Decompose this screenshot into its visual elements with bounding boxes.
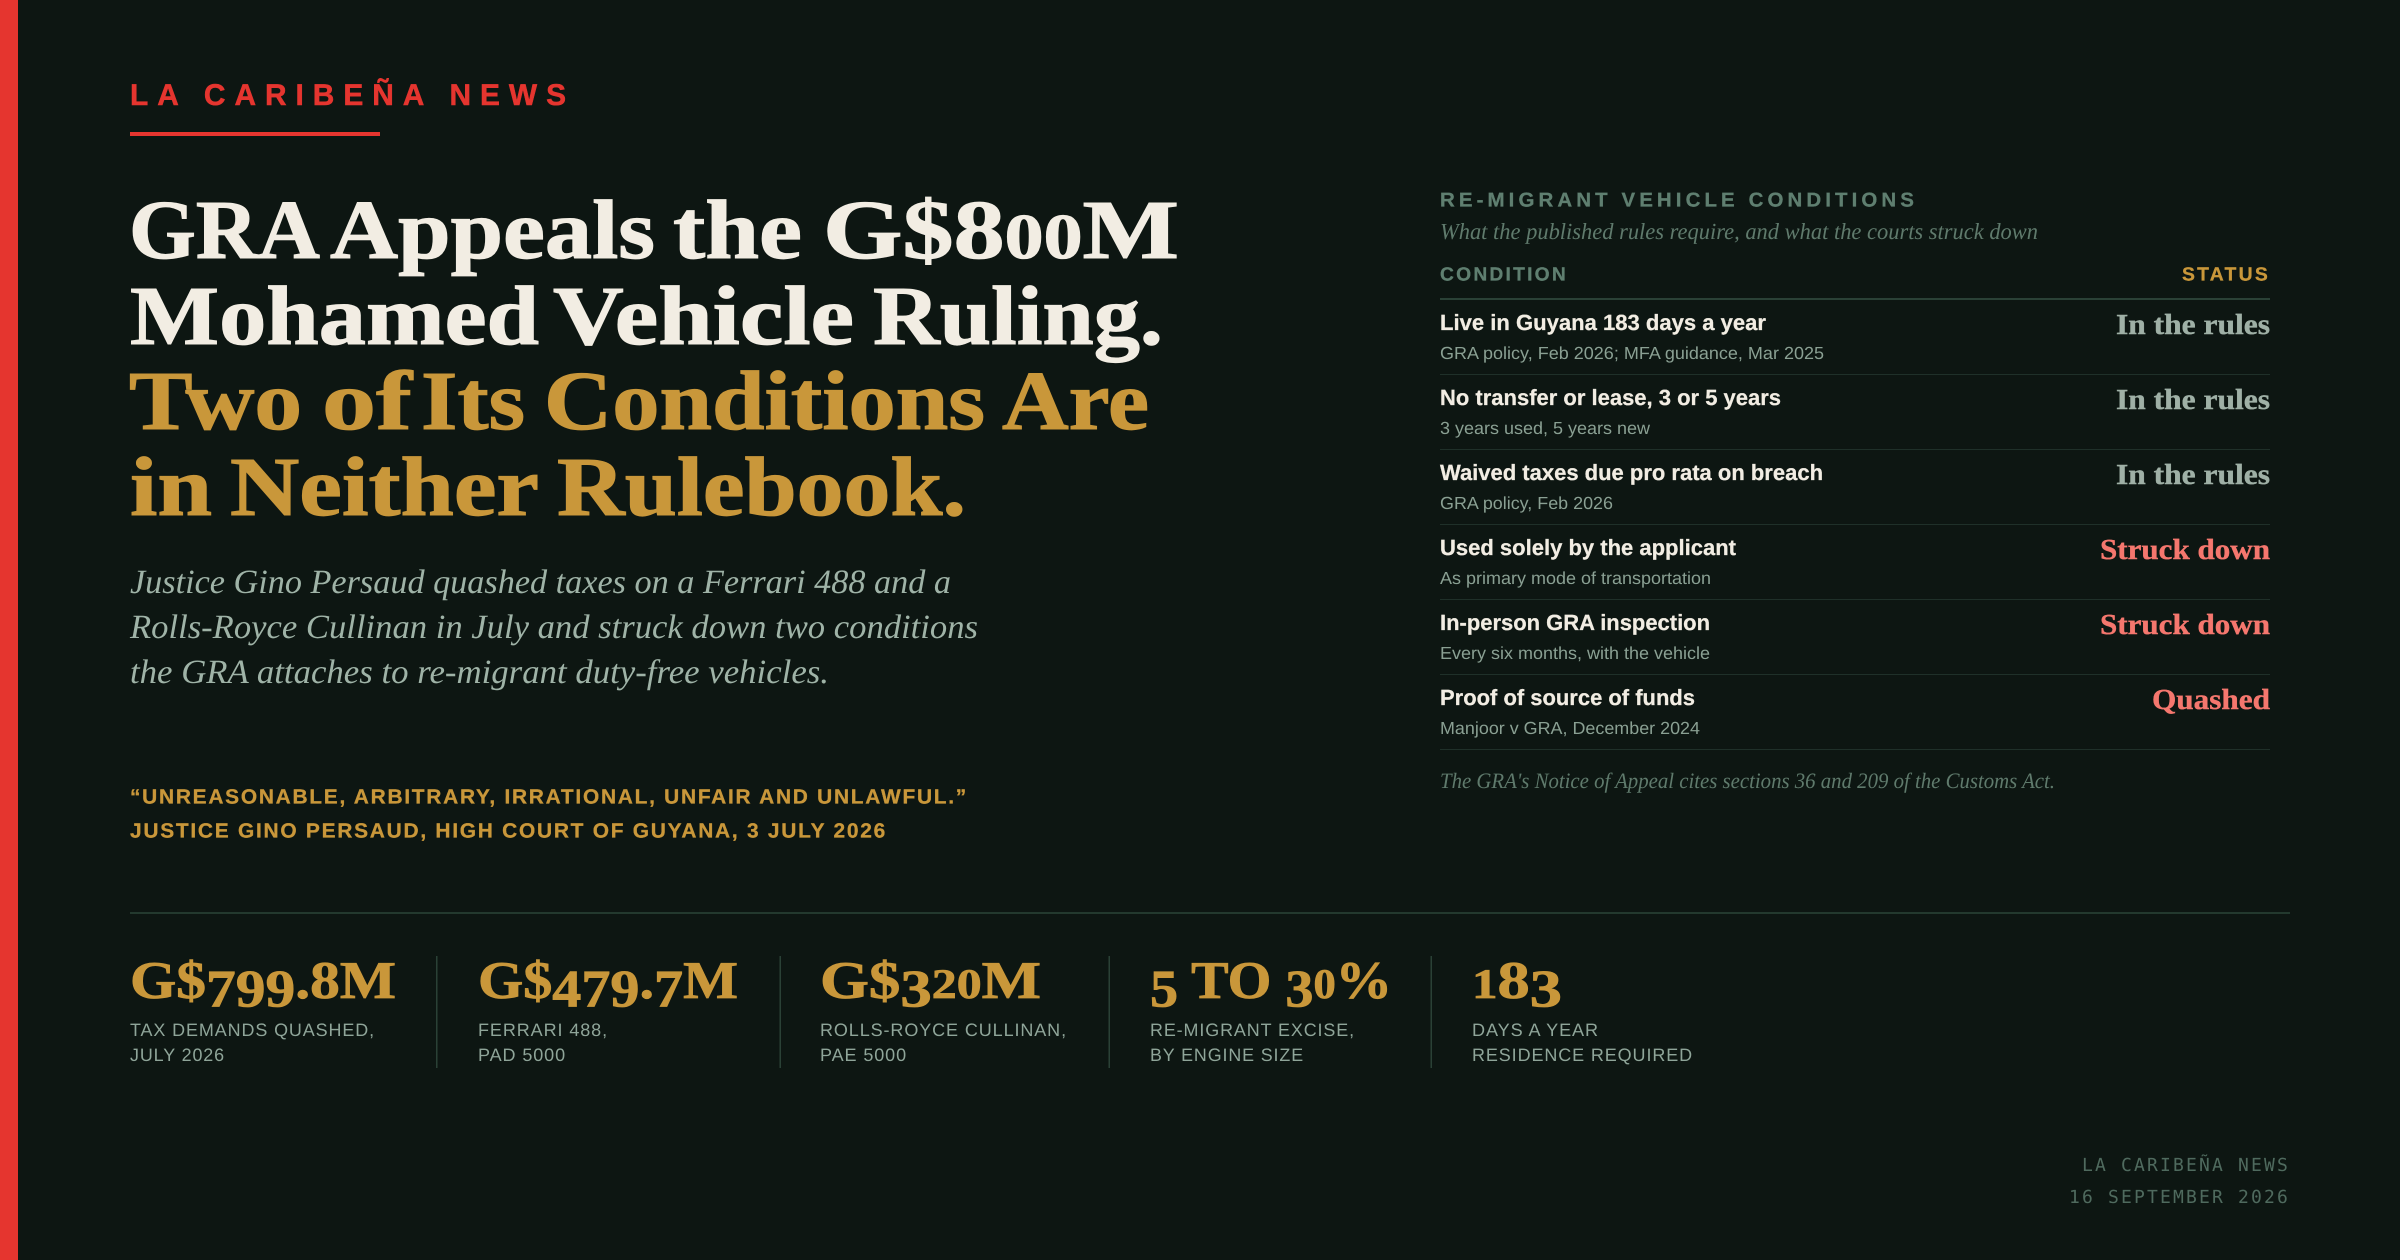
stat: excise: 5 <box>1150 960 1178 1018</box>
stat: Ferrari: . <box>640 952 654 1010</box>
table heading: RE-MIGRANT VEHICLE CONDITIONS <box>1440 190 1918 212</box>
row: live in Guyana: Live in Guyana 183 days a year <box>1440 310 1766 335</box>
row: live in Guyana: GRA policy, Feb 2026; MFA guidance, Mar 2025 <box>1440 343 1824 363</box>
stat: Ferrari: PAD 5000 <box>478 1045 566 1065</box>
stat: residence days: RESIDENCE REQUIRED <box>1472 1045 1693 1065</box>
row: waived taxes: GRA policy, Feb 2026 <box>1440 493 1613 513</box>
row: in-person inspection: In-person GRA inspection <box>1440 610 1710 635</box>
masthead <box>130 78 575 136</box>
row: in-person inspection <box>1440 609 2270 663</box>
row: waived taxes: In the rules <box>2116 459 2270 491</box>
stat: excise: 0 <box>1314 962 1336 1008</box>
stat: residence days: 3 <box>1530 960 1562 1018</box>
stat: Ferrari: G$ <box>478 952 546 1010</box>
stat: tax demands: G$ <box>130 952 198 1010</box>
row: live in Guyana: In the rules <box>2116 309 2270 341</box>
stat: tax demands <box>130 952 396 1065</box>
stat: excise <box>1150 952 1392 1065</box>
stat: Ferrari: 7 <box>654 960 683 1018</box>
headline: of <box>322 355 413 448</box>
stat: Ferrari: 479 <box>552 960 640 1018</box>
stat: Rolls-Royce: ROLLS-ROYCE CULLINAN, <box>820 1020 1067 1040</box>
row: no transfer: No transfer or lease, 3 or 5 years <box>1440 385 1781 410</box>
column header: status: STATUS <box>2182 264 2270 286</box>
row: used solely <box>1440 534 2270 588</box>
panel: conditions table <box>1440 190 2270 793</box>
stat: tax demands: .8M <box>295 952 396 1010</box>
row: proof of funds: Quashed <box>2152 684 2270 716</box>
headline: in <box>130 441 212 534</box>
row: no transfer: 3 years used, 5 years new <box>1440 418 1650 438</box>
row: used solely: Used solely by the applicant <box>1440 535 1737 560</box>
footer credit: LA CARIBEÑA NEWS <box>2082 1154 2290 1176</box>
row: used solely: As primary mode of transportation <box>1440 568 1711 588</box>
stat: tax demands: TAX DEMANDS QUASHED, <box>130 1020 375 1040</box>
stat: excise: % <box>1336 952 1389 1010</box>
row: in-person inspection: Struck down <box>2100 609 2270 641</box>
row: proof of funds: Proof of source of funds <box>1440 685 1695 710</box>
footer credit <box>2069 1154 2290 1208</box>
red edge bar <box>0 0 18 1260</box>
deck text: Justice Gino Persaud quashed taxes on a Ferrari 488 and a <box>130 564 951 601</box>
stat: Rolls-Royce: G$ <box>820 952 888 1010</box>
headline: Appeals <box>330 184 655 277</box>
stat: Rolls-Royce: 20 <box>932 962 982 1008</box>
column header: condition: CONDITION <box>1440 264 1568 286</box>
deck text: Rolls-Royce Cullinan in July and struck down two conditions <box>129 609 978 646</box>
headline <box>129 184 1179 534</box>
deck text: the GRA attaches to re-migrant duty-free vehicles. <box>130 654 829 691</box>
stat: residence days: DAYS A YEAR <box>1472 1020 1599 1040</box>
pull quote: JUSTICE GINO PERSAUD, HIGH COURT OF GUYANA, 3 JULY 2026 <box>130 820 887 842</box>
stat: excise: RE-MIGRANT EXCISE, <box>1150 1020 1355 1040</box>
stat: Ferrari: FERRARI 488, <box>478 1020 608 1040</box>
masthead: LA CARIBEÑA NEWS <box>130 78 575 112</box>
table subheading: What the published rules require, and what the courts struck down <box>1440 219 2038 244</box>
row: no transfer: In the rules <box>2116 384 2270 416</box>
pull quote: “UNREASONABLE, ARBITRARY, IRRATIONAL, UNFAIR AND UNLAWFUL.” <box>130 786 968 808</box>
pull quote <box>130 786 968 842</box>
row: used solely: Struck down <box>2100 534 2270 566</box>
stat: Rolls-Royce: 3 <box>900 960 932 1018</box>
row: waived taxes: Waived taxes due pro rata on breach <box>1440 460 1823 485</box>
stat: excise: TO <box>1178 952 1285 1010</box>
row: proof of funds <box>1440 684 2270 738</box>
headline: Ruling. <box>873 270 1163 363</box>
stat: Rolls-Royce: PAE 5000 <box>820 1045 907 1065</box>
row: waived taxes <box>1440 459 2270 513</box>
headline: Are <box>1002 355 1149 448</box>
headline: Two <box>129 355 302 448</box>
headline: Mohamed <box>130 270 539 363</box>
stat: excise: 3 <box>1285 960 1314 1018</box>
headline: G$8 00M <box>823 184 1179 277</box>
stat: tax demands: 799 <box>206 960 295 1018</box>
headline: Rulebook. <box>557 441 966 534</box>
stat: Rolls-Royce: M <box>982 952 1032 1010</box>
headline: Vehicle <box>553 270 854 363</box>
stat: residence days: 18 <box>1472 952 1524 1010</box>
headline: Neither <box>230 441 539 534</box>
stat: Rolls-Royce <box>820 952 1067 1065</box>
stat: excise: BY ENGINE SIZE <box>1150 1045 1304 1065</box>
stat: Ferrari <box>478 952 738 1065</box>
row: no transfer <box>1440 384 2270 438</box>
footer credit: 16 SEPTEMBER 2026 <box>2069 1187 2290 1208</box>
headline: Its <box>421 355 525 448</box>
stat: residence days <box>1472 952 1693 1065</box>
headline: Conditions <box>544 355 985 448</box>
row: proof of funds: Manjoor v GRA, December 2024 <box>1440 718 1700 738</box>
row: live in Guyana <box>1440 309 2270 363</box>
deck text <box>129 564 978 691</box>
headline: GRA <box>129 184 320 277</box>
row: in-person inspection: Every six months, with the vehicle <box>1440 643 1710 663</box>
table footnote: The GRA's Notice of Appeal cites sections 36 and 209 of the Customs Act. <box>1440 768 2055 793</box>
headline: the <box>673 184 802 277</box>
stat: tax demands: JULY 2026 <box>130 1045 225 1065</box>
stat: Ferrari: M <box>683 952 738 1010</box>
